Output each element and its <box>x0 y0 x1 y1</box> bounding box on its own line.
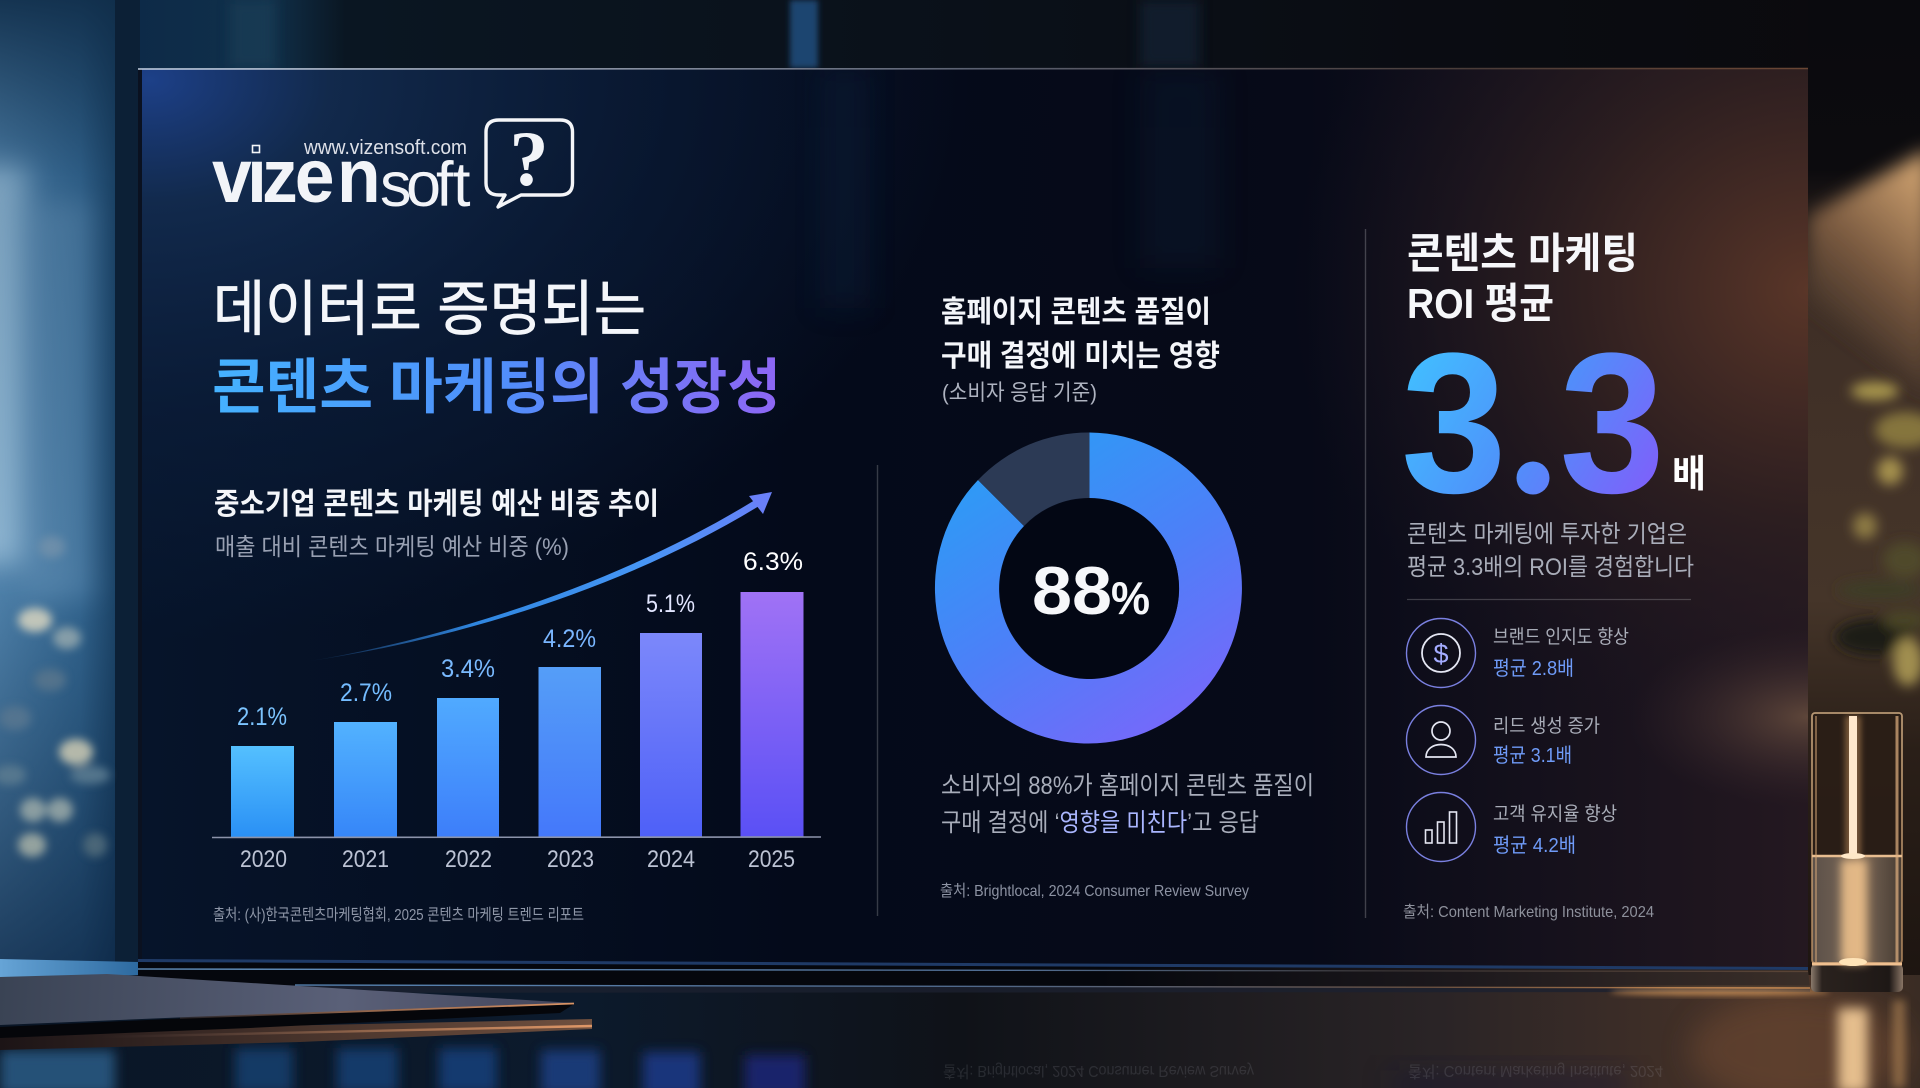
chart subtitle: 매출 대비 콘텐츠 마케팅 예산 비중 (%) <box>215 534 569 561</box>
value labels: 6.3% <box>743 548 803 576</box>
metric: brand awareness <box>1406 618 1629 688</box>
ROI description: 콘텐츠 마케팅에 투자한 기업은 <box>1407 521 1687 548</box>
logo word: vizen: vızen <box>212 133 381 218</box>
donut subheading: (소비자 응답 기준) <box>942 380 1097 405</box>
panel lower lip <box>0 962 1830 996</box>
donut caption <box>941 772 1314 837</box>
ROI heading: 콘텐츠 마케팅 <box>1407 230 1638 277</box>
logo url: www.vizensoft.com <box>303 137 467 159</box>
logo question mark: ? <box>510 115 548 202</box>
panel: donut <box>935 296 1314 900</box>
ROI source: 출처: Content Marketing Institute, 2024 <box>1403 903 1654 921</box>
blue ledge <box>0 959 138 979</box>
logo speech bubble <box>486 120 572 207</box>
donut heading: 홈페이지 콘텐츠 품질이 <box>941 296 1211 329</box>
panel: bar chart <box>212 488 821 924</box>
year labels: 2024 <box>647 846 695 873</box>
donut caption: 구매 결정에 ‘영향을 미친다’고 응답 <box>941 809 1259 837</box>
donut value: 88 <box>1032 553 1112 629</box>
value labels <box>237 548 803 731</box>
main title <box>212 276 781 421</box>
donut heading: 구매 결정에 미치는 영향 <box>941 340 1220 373</box>
donut value <box>1032 553 1150 629</box>
value labels: 4.2% <box>543 625 596 653</box>
ROI value: 3.3 <box>1401 312 1665 535</box>
metric label: 브랜드 인지도 향상 <box>1493 626 1629 648</box>
screen panel <box>138 68 1808 972</box>
chart source: 출처: (사)한국콘텐츠마케팅협회, 2025 콘텐츠 마케팅 트렌드 리포트 <box>213 906 584 924</box>
logo word: soft: soft <box>380 150 471 220</box>
year labels <box>240 846 795 873</box>
value labels: 2.7% <box>340 679 392 707</box>
floor reflection of sources: 출처: Content Marketing Institute, 2024 <box>1408 1062 1663 1080</box>
metric value: 평균 2.8배 <box>1493 657 1574 680</box>
trend arrow <box>304 492 772 662</box>
bars <box>231 592 804 837</box>
donut source: 출처: Brightlocal, 2024 Consumer Review Survey <box>940 882 1249 900</box>
plant <box>1835 382 1920 686</box>
year labels: 2023 <box>547 846 594 873</box>
donut chart <box>935 432 1242 743</box>
year labels: 2022 <box>445 846 492 873</box>
lamp <box>1811 713 1903 992</box>
year labels: 2020 <box>240 846 287 873</box>
year labels: 2021 <box>342 846 389 873</box>
donut caption: 소비자의 88%가 홈페이지 콘텐츠 품질이 <box>941 772 1314 800</box>
floor reflection of sources: 출처: Brightlocal, 2024 Consumer Review Survey <box>943 1062 1254 1080</box>
floor reflection of sources <box>943 1062 1663 1080</box>
table surface <box>0 975 1920 1088</box>
icon: dollar <box>1406 618 1476 688</box>
ROI heading: ROI 평균 <box>1407 280 1554 327</box>
panel: ROI <box>1401 230 1706 921</box>
year labels: 2025 <box>748 846 795 873</box>
value labels: 2.1% <box>237 703 287 731</box>
chart title: 중소기업 콘텐츠 마케팅 예산 비중 추이 <box>214 488 659 521</box>
metric value: 평균 4.2배 <box>1493 834 1576 857</box>
metric label: 리드 생성 증가 <box>1493 715 1600 737</box>
donut heading <box>941 296 1220 373</box>
metric value: 평균 3.1배 <box>1493 744 1572 767</box>
metric label: 고객 유지율 향상 <box>1493 803 1617 825</box>
ROI heading <box>1407 230 1638 327</box>
title line 2: 콘텐츠 마케팅의 성장성 <box>212 354 781 421</box>
logo <box>212 115 572 220</box>
metric: lead generation <box>1406 706 1600 774</box>
ROI description <box>1407 521 1694 581</box>
value labels: 3.4% <box>441 655 495 683</box>
icon: dollar: $ <box>1433 639 1449 669</box>
icon: person <box>1406 706 1476 774</box>
laptop <box>0 974 592 1050</box>
value labels: 5.1% <box>646 590 695 618</box>
icon: bars <box>1406 792 1476 862</box>
city bokeh lights <box>0 536 110 857</box>
ROI unit: 배 <box>1672 454 1706 496</box>
axis <box>212 836 821 838</box>
ROI description: 평균 3.3배의 ROI를 경험합니다 <box>1407 554 1694 581</box>
logo i-dot square <box>252 146 260 152</box>
metric: retention <box>1406 792 1617 862</box>
donut value: % <box>1111 572 1150 624</box>
panel top edge <box>138 68 1808 70</box>
title line 1: 데이터로 증명되는 <box>213 276 646 343</box>
